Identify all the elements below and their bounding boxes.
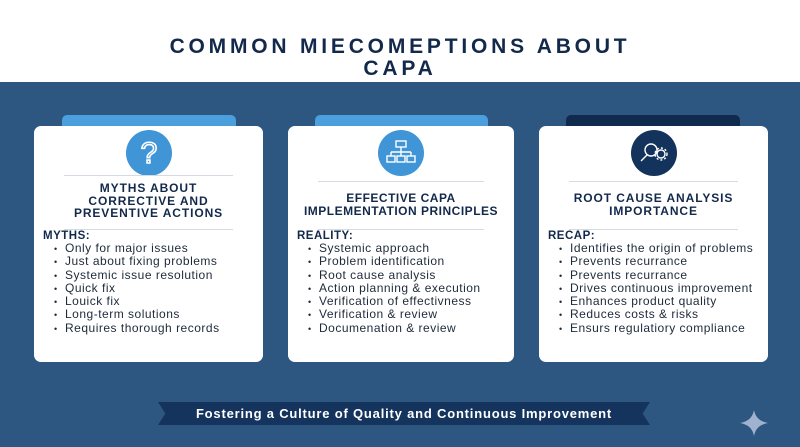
- heading: root cause: [574, 191, 733, 218]
- list: myths: Quick fix: [65, 281, 116, 295]
- list: myths: [54, 241, 220, 335]
- heading: myths: MYTHS ABOUT: [100, 181, 197, 195]
- list: reality: Action planning & execution: [319, 281, 481, 295]
- heading: myths: CORRECTIVE AND: [88, 194, 209, 208]
- list: recap: Prevents recurrance: [570, 254, 688, 268]
- heading: root cause: IMPORTANCE: [609, 204, 698, 218]
- panel: principles: [288, 126, 514, 362]
- tab: card 2: [315, 115, 488, 131]
- list: reality: Documenation & review: [319, 321, 456, 335]
- list: myths: Just about fixing problems: [65, 254, 217, 268]
- heading: principles: EFFECTIVE CAPA: [346, 191, 456, 205]
- title: COMMON MIECOMEPTIONS ABOUT: [170, 35, 630, 58]
- label: reality: REALITY:: [297, 230, 353, 242]
- panel: myths: [34, 126, 263, 362]
- list: reality: Verification & review: [319, 307, 438, 321]
- list: reality: Systemic approach: [319, 241, 430, 255]
- list: myths: Requires thorough records: [65, 321, 220, 335]
- list: recap: Ensurs regulatiory compliance: [570, 321, 745, 335]
- panel: root cause: [539, 126, 768, 362]
- label: recap: RECAP:: [548, 230, 595, 242]
- list: myths: Systemic issue resolution: [65, 268, 213, 282]
- title: [170, 35, 630, 80]
- list: reality: [308, 241, 481, 335]
- list: myths: Louick fix: [65, 294, 120, 308]
- list: recap: Identifies the origin of problems: [570, 241, 753, 255]
- list: recap: Prevents recurrance: [570, 268, 688, 282]
- list: recap: [559, 241, 753, 335]
- icon: sparkle: [740, 410, 768, 436]
- list: reality: Root cause analysis: [319, 268, 436, 282]
- title: CAPA: [363, 56, 437, 80]
- heading: principles: IMPLEMENTATION PRINCIPLES: [304, 204, 498, 218]
- list: myths: Long-term solutions: [65, 307, 180, 321]
- heading: root cause: ROOT CAUSE ANALYSIS: [574, 191, 733, 205]
- heading: myths: PREVENTIVE ACTIONS: [74, 206, 223, 220]
- list: myths: Only for major issues: [65, 241, 188, 255]
- icon: flowchart: [378, 130, 424, 176]
- list: recap: Enhances product quality: [570, 294, 717, 308]
- tab: card 1: [62, 115, 236, 131]
- list: reality: Problem identification: [319, 254, 445, 268]
- banner: Fostering a Culture of Quality and Continuous Improvement: [196, 406, 612, 421]
- heading: principles: [304, 191, 498, 218]
- heading: myths: [74, 181, 223, 220]
- banner: [158, 402, 650, 425]
- list: recap: Drives continuous improvement: [570, 281, 753, 295]
- icon: magnifier and gear: [630, 130, 676, 176]
- icon: question mark: ?: [140, 137, 157, 170]
- list: recap: Reduces costs & risks: [570, 307, 699, 321]
- tab: card 3: [566, 115, 740, 131]
- label: myths: MYTHS:: [43, 230, 90, 242]
- list: reality: Verification of effectivness: [319, 294, 472, 308]
- icon: question mark: [126, 130, 172, 176]
- header band: [0, 0, 800, 82]
